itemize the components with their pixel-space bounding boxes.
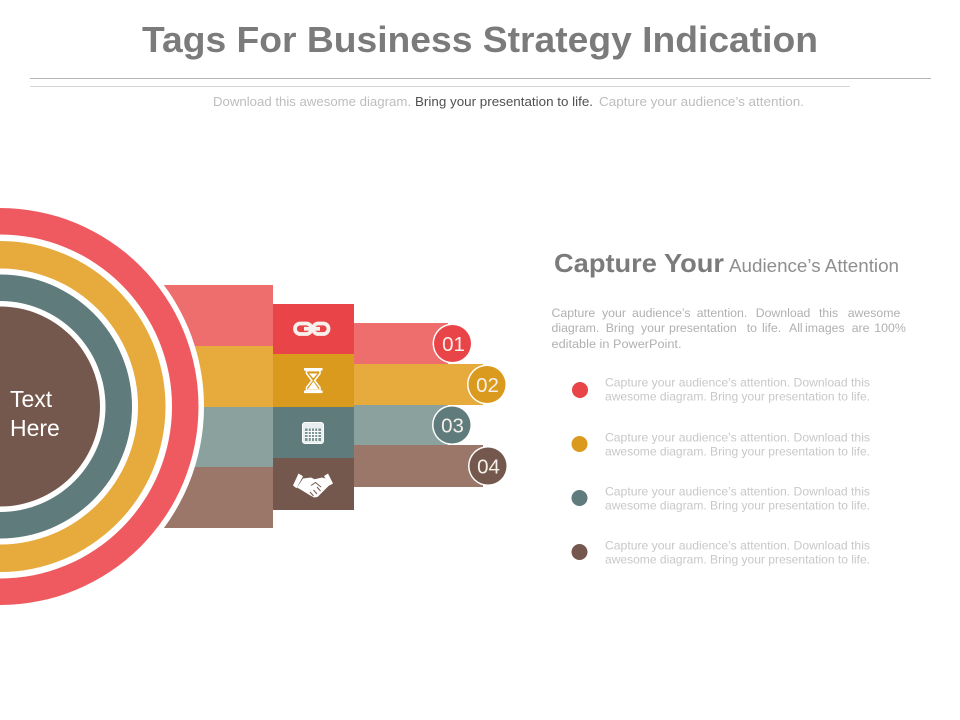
list item 4: Capture your audience’s attention. Download this	[605, 538, 870, 552]
list item 3: awesome diagram. Bring your presentation to life.	[605, 498, 870, 512]
body paragraph: audience’s	[632, 306, 691, 320]
concentric circles	[0, 202, 204, 610]
icon: chain link	[295, 324, 328, 334]
badge 01	[432, 324, 472, 364]
body paragraph: editable in PowerPoint.	[552, 337, 682, 351]
body paragraph: are	[852, 321, 870, 335]
left colour bands	[150, 285, 273, 528]
icon: handshake	[293, 474, 333, 498]
icon: calendar	[302, 422, 324, 444]
body paragraph	[552, 306, 906, 351]
body paragraph: this	[819, 306, 838, 320]
badge 01: 01	[442, 333, 465, 356]
icon tile column	[273, 304, 354, 510]
badge 02	[467, 364, 507, 404]
body paragraph: your	[641, 321, 665, 335]
centre label: Text	[10, 386, 53, 412]
badge 03	[432, 405, 472, 445]
body paragraph: images	[805, 321, 845, 335]
body paragraph: your	[602, 306, 626, 320]
body paragraph: presentation	[669, 321, 737, 335]
body paragraph: to	[747, 321, 757, 335]
list item 1	[572, 376, 870, 404]
body paragraph: 100%	[874, 321, 906, 335]
body paragraph: All	[789, 321, 803, 335]
badge 04	[468, 446, 508, 486]
title: Tags For Business Strategy Indication	[142, 19, 818, 60]
right heading: Audience’s Attention	[729, 256, 899, 276]
body paragraph: life.	[762, 321, 781, 335]
list item 2: Capture your audience’s attention. Download this	[605, 430, 870, 444]
subtitle: Download this awesome diagram.	[213, 94, 411, 109]
body paragraph: attention.	[697, 306, 747, 320]
list item 3: Capture your audience’s attention. Download this	[605, 484, 870, 498]
body paragraph: Bring	[606, 321, 635, 335]
badge 02: 02	[476, 374, 499, 397]
body paragraph: Download	[756, 306, 811, 320]
badge 04: 04	[477, 456, 500, 478]
list item 2: awesome diagram. Bring your presentation to life.	[605, 444, 870, 458]
icon: hourglass	[304, 368, 322, 393]
body paragraph: Capture	[552, 306, 595, 320]
right colour bands	[354, 323, 483, 487]
list item 2	[572, 430, 870, 458]
list item 4: awesome diagram. Bring your presentation to life.	[605, 552, 870, 566]
body paragraph: awesome	[848, 306, 900, 320]
badge 03: 03	[441, 414, 464, 438]
subtitle: Bring your presentation to life.	[415, 94, 593, 109]
right heading: Capture Your	[554, 248, 724, 278]
subtitle: Capture your audience’s attention.	[599, 94, 804, 109]
list item 1: awesome diagram. Bring your presentation to life.	[605, 390, 870, 404]
centre label: Here	[10, 415, 60, 441]
list item 1: Capture your audience’s attention. Download this	[605, 376, 870, 390]
body paragraph: diagram.	[552, 321, 599, 335]
subtitle	[213, 94, 804, 109]
list item 3	[572, 484, 870, 512]
list item 4	[572, 538, 870, 566]
